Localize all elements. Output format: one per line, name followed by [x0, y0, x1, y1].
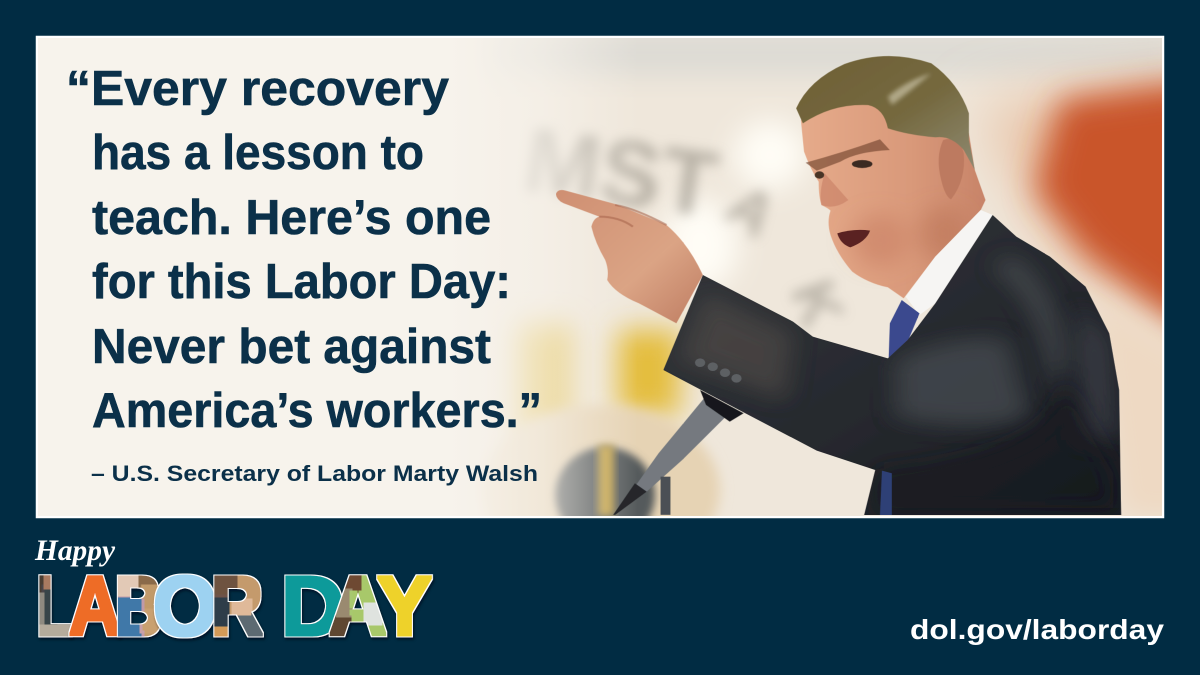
- letters: A: [69, 559, 121, 653]
- attribution: – U.S. Secretary of Labor Marty Walsh: [91, 461, 538, 486]
- lower necktie: [880, 471, 892, 515]
- blurred banner lettering: MST: [517, 109, 724, 237]
- necktie: [889, 300, 919, 358]
- quote: has a lesson to: [92, 126, 424, 180]
- cream fade: [38, 38, 638, 516]
- hair parting highlight: [888, 73, 931, 105]
- nose shadow: [821, 173, 848, 207]
- letters: [37, 559, 432, 653]
- photo background: [488, 38, 1162, 516]
- quote: Never bet against: [92, 320, 491, 374]
- hair: [796, 56, 975, 170]
- letters: L: [37, 559, 72, 653]
- suit jacket: [663, 215, 1121, 515]
- blurred banner lettering: [528, 128, 846, 331]
- letters: Y: [377, 559, 432, 653]
- sleeve buttons: [695, 358, 742, 383]
- eye and brow: [806, 139, 890, 179]
- quote: America’s workers.”: [92, 384, 542, 438]
- letters: A: [329, 559, 387, 653]
- quote: for this Labor Day:: [92, 255, 511, 309]
- letters: D: [281, 559, 344, 653]
- hand: [556, 190, 703, 323]
- suit sheen: [678, 257, 1121, 515]
- shirt collar: [906, 210, 993, 315]
- person: Marty Walsh: [556, 56, 1121, 515]
- letters: O: [153, 559, 217, 653]
- quote: “Every recovery: [66, 62, 449, 116]
- quote: [66, 62, 542, 438]
- happy script: Happy: [34, 534, 116, 567]
- cheek and neck shading: [852, 207, 967, 267]
- logo: Happy Labor Day: [34, 534, 432, 653]
- letters: R: [211, 559, 263, 653]
- quote: teach. Here’s one: [92, 191, 491, 245]
- website url: dol.gov/laborday: [910, 614, 1164, 645]
- letters: B: [115, 559, 162, 653]
- microphone: [613, 390, 744, 515]
- mouth: [837, 230, 870, 247]
- blurred banner lettering: K: [777, 271, 857, 337]
- knuckle folds: [599, 205, 666, 227]
- face and neck: [801, 87, 986, 298]
- ear: [939, 139, 964, 199]
- blurred banner lettering: A: [715, 171, 788, 251]
- panel: photo with quote: [36, 36, 1164, 518]
